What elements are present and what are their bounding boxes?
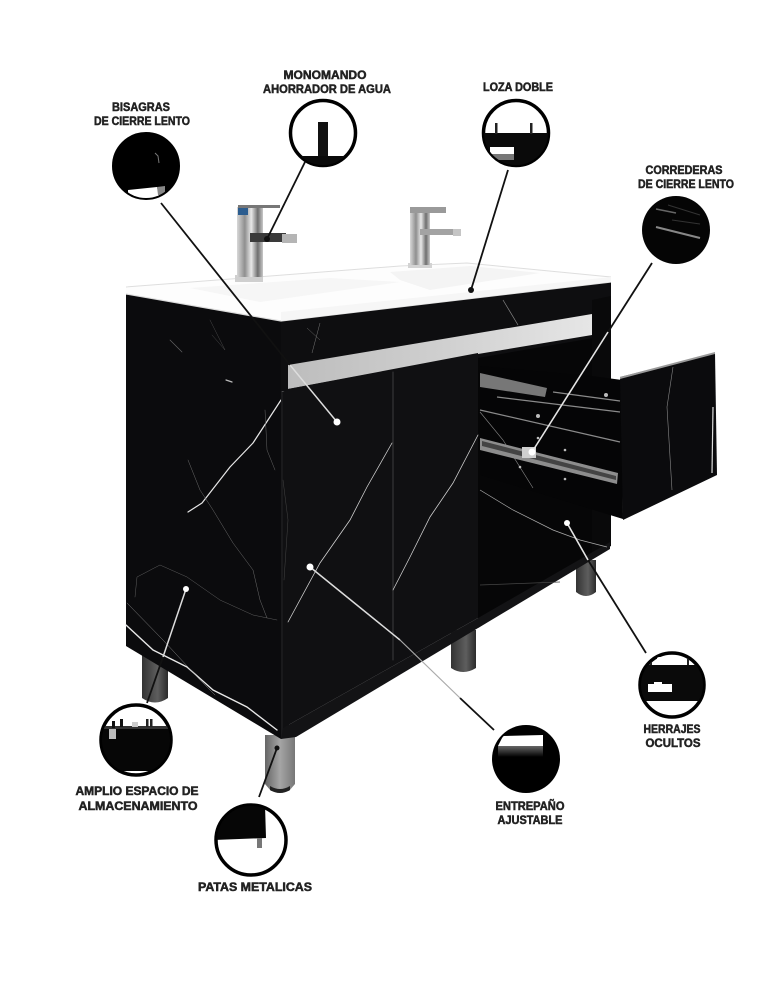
label: amplio espacio: AMPLIO ESPACIO DE — [76, 786, 199, 798]
label: herrajes: HERRAJES — [644, 724, 701, 736]
label: amplio espacio — [76, 786, 199, 813]
label: correderas: DE CIERRE LENTO — [638, 179, 734, 191]
leader: patas — [259, 746, 280, 797]
callout: patas metalicas — [198, 805, 312, 894]
label: bisagras — [94, 102, 190, 128]
label: monomando — [263, 70, 391, 96]
label: correderas — [638, 165, 734, 191]
label: entrepano: AJUSTABLE — [498, 815, 563, 827]
icon: storage detail — [100, 705, 172, 775]
open interior — [478, 320, 610, 628]
label: monomando: AHORRADOR DE AGUA — [263, 84, 391, 96]
label: monomando: MONOMANDO — [284, 70, 367, 82]
label: correderas: CORREDERAS — [646, 165, 723, 177]
metal legs — [142, 560, 596, 793]
drawer front — [620, 352, 717, 520]
label: patas metalicas: PATAS METALICAS — [198, 882, 312, 894]
white recessed strip — [288, 314, 592, 389]
vanity cabinet product — [126, 205, 717, 793]
label: herrajes: OCULTOS — [646, 738, 701, 750]
callout: monomando — [263, 70, 391, 170]
leader: correderas — [528, 263, 652, 456]
label: entrepano: ENTREPAÑO — [496, 800, 565, 813]
label: loza doble: LOZA DOBLE — [483, 82, 553, 94]
side panel — [126, 293, 281, 739]
callout: bisagras — [94, 102, 190, 200]
icon: leg detail — [215, 805, 286, 875]
icon: shelf detail — [492, 725, 560, 793]
leader: bisagras — [161, 203, 340, 426]
icon: hinge detail — [113, 133, 179, 200]
callout: amplio espacio — [76, 705, 199, 813]
callout: herrajes — [640, 653, 704, 750]
shelf veins — [480, 490, 607, 585]
icon: slide rail detail — [642, 196, 710, 264]
leader: monomando — [264, 162, 305, 242]
front frame — [281, 282, 611, 739]
leader: amplio espacio — [147, 586, 189, 703]
icon: faucet detail — [290, 100, 356, 170]
leader: loza doble — [468, 170, 508, 293]
leader: herrajes — [564, 520, 646, 653]
callout: correderas — [638, 165, 734, 264]
label: entrepano — [496, 800, 565, 827]
label: bisagras: DE CIERRE LENTO — [94, 116, 190, 128]
callout: entrepano — [492, 725, 565, 827]
faucet left — [235, 205, 297, 282]
icon: basin detail — [480, 100, 552, 169]
doors — [283, 353, 478, 728]
label: amplio espacio: ALMACENAMIENTO — [78, 801, 198, 813]
leader: entrepano — [306, 564, 494, 730]
countertop double basin — [126, 263, 611, 321]
callout: loza doble — [480, 82, 553, 169]
icon: hardware detail — [640, 653, 704, 717]
label: herrajes — [644, 724, 701, 750]
faucet right — [408, 207, 461, 268]
label: bisagras: BISAGRAS — [112, 102, 170, 114]
open drawer — [480, 352, 717, 520]
